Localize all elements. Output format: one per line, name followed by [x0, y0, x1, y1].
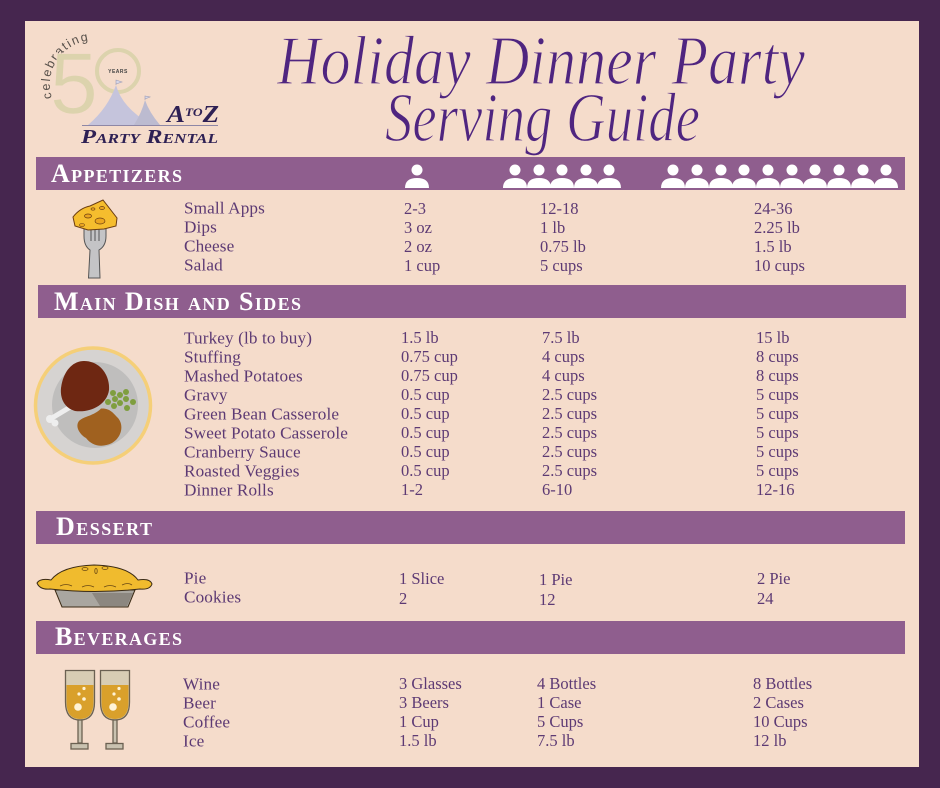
table: main dish and sides: 1-2: [401, 480, 423, 499]
table: main dish and sides: [184, 328, 799, 500]
table: main dish and sides: Turkey (lb to buy): [184, 328, 312, 348]
table: main dish and sides: 2.5 cups: [542, 385, 597, 404]
section bar: appetizers: [36, 157, 905, 190]
logo: 5: [50, 36, 98, 132]
table: main dish and sides: 0.5 cup: [401, 461, 450, 480]
table: main dish and sides: Dinner Rolls: [184, 480, 274, 500]
table: beverages: Coffee: [183, 712, 230, 732]
table: appetizers: 2-3: [404, 199, 426, 218]
icon: ten people: [661, 164, 898, 188]
logo: [41, 34, 219, 148]
table: main dish and sides: 1.5 lb: [401, 328, 439, 347]
table: main dish and sides: Sweet Potato Casserole: [184, 424, 348, 442]
logo: YEARS: [108, 69, 128, 75]
table: beverages: 2 Cases: [753, 693, 804, 712]
icon: five people: [503, 164, 621, 188]
table: dessert: 2: [399, 589, 407, 608]
table: appetizers: 1.5 lb: [754, 237, 792, 256]
table: appetizers: 3 oz: [404, 218, 432, 237]
table: dessert: 1 Slice: [399, 569, 444, 588]
table: dessert: 2 Pie: [757, 569, 790, 588]
table: dessert: 24: [757, 589, 774, 608]
table: main dish and sides: 0.75 cup: [401, 347, 458, 366]
table: appetizers: 0.75 lb: [540, 237, 586, 256]
table: beverages: 1.5 lb: [399, 731, 437, 750]
table: dessert: Cookies: [184, 588, 241, 606]
table: main dish and sides: 0.5 cup: [401, 385, 450, 404]
table: beverages: 4 Bottles: [537, 674, 596, 693]
table: beverages: 7.5 lb: [537, 731, 575, 750]
table: main dish and sides: Roasted Veggies: [184, 462, 300, 480]
table: beverages: Wine: [183, 674, 220, 694]
table: main dish and sides: 2.5 cups: [542, 442, 597, 461]
table: main dish and sides: 0.5 cup: [401, 442, 450, 461]
logo: Z: [201, 102, 219, 128]
logo: TO: [185, 105, 203, 119]
table: beverages: Beer: [183, 694, 216, 712]
logo: celebrating: [41, 34, 88, 98]
table: main dish and sides: 2.5 cups: [542, 404, 597, 423]
table: beverages: 3 Glasses: [399, 674, 462, 693]
table: beverages: 8 Bottles: [753, 674, 812, 693]
table: beverages: 12 lb: [753, 731, 786, 750]
table: main dish and sides: 4 cups: [542, 347, 585, 366]
table: main dish and sides: Stuffing: [184, 348, 241, 366]
table: main dish and sides: Mashed Potatoes: [184, 366, 303, 386]
icon: dinner plate: [36, 348, 150, 463]
table: main dish and sides: 12-16: [756, 480, 794, 499]
table: beverages: 3 Beers: [399, 693, 449, 712]
title: Holiday Dinner Party: [276, 23, 806, 100]
icon: champagne glasses: [66, 670, 130, 749]
logo: Party Rental: [80, 126, 218, 148]
table: appetizers: 12-18: [540, 199, 578, 218]
heading: beverages: Beverages: [55, 622, 182, 651]
table: appetizers: 2 oz: [404, 237, 432, 256]
table: main dish and sides: 2.5 cups: [542, 461, 597, 480]
title: [276, 23, 806, 157]
section bar: main dish and sides: [38, 285, 906, 318]
table: main dish and sides: 8 cups: [756, 347, 799, 366]
table: appetizers: 10 cups: [754, 256, 805, 275]
table: appetizers: 1 lb: [540, 218, 565, 237]
table: beverages: 1 Cup: [399, 712, 439, 731]
table: appetizers: 2.25 lb: [754, 218, 800, 237]
table: main dish and sides: 5 cups: [756, 404, 799, 423]
table: main dish and sides: 0.5 cup: [401, 404, 450, 423]
table: appetizers: 24-36: [754, 199, 792, 218]
table: beverages: Ice: [183, 732, 205, 750]
table: main dish and sides: 5 cups: [756, 423, 799, 442]
logo: A: [167, 102, 183, 128]
table: dessert: Pie: [184, 568, 207, 588]
table: appetizers: Cheese: [184, 236, 235, 256]
icon: cheese on fork: [73, 200, 117, 278]
icon: one person: [405, 164, 429, 188]
table: beverages: 10 Cups: [753, 712, 808, 731]
table: main dish and sides: 5 cups: [756, 461, 799, 480]
table: main dish and sides: 4 cups: [542, 366, 585, 385]
table: main dish and sides: 5 cups: [756, 442, 799, 461]
table: main dish and sides: 0.75 cup: [401, 366, 458, 385]
table: dessert: 1 Pie: [539, 570, 572, 589]
table: main dish and sides: Green Bean Casserole: [184, 404, 339, 424]
heading: dessert: Dessert: [56, 512, 152, 541]
title: Serving Guide: [385, 80, 700, 157]
table: main dish and sides: Gravy: [184, 386, 228, 404]
table: main dish and sides: Cranberry Sauce: [184, 442, 301, 462]
table: beverages: [183, 674, 812, 750]
table: appetizers: 5 cups: [540, 256, 583, 275]
table: appetizers: Dips: [184, 218, 217, 236]
table: beverages: 5 Cups: [537, 712, 583, 731]
heading: appetizers: Appetizers: [51, 159, 182, 188]
table: appetizers: [184, 198, 805, 275]
table: dessert: [184, 568, 790, 609]
table: appetizers: Small Apps: [184, 198, 265, 218]
section bar: beverages: [36, 621, 905, 654]
table: beverages: 1 Case: [537, 693, 581, 712]
table: main dish and sides: 15 lb: [756, 328, 789, 347]
table: appetizers: Salad: [184, 256, 223, 274]
table: main dish and sides: 5 cups: [756, 385, 799, 404]
table: main dish and sides: 7.5 lb: [542, 328, 580, 347]
table: main dish and sides: 0.5 cup: [401, 423, 450, 442]
section bar: dessert: [36, 511, 905, 544]
table: main dish and sides: 8 cups: [756, 366, 799, 385]
heading: main dish and sides: Main Dish and Sides: [54, 287, 301, 316]
icon: pie: [37, 565, 152, 607]
table: dessert: 12: [539, 590, 556, 609]
table: main dish and sides: 6-10: [542, 480, 572, 499]
table: main dish and sides: 2.5 cups: [542, 423, 597, 442]
table: appetizers: 1 cup: [404, 256, 440, 275]
